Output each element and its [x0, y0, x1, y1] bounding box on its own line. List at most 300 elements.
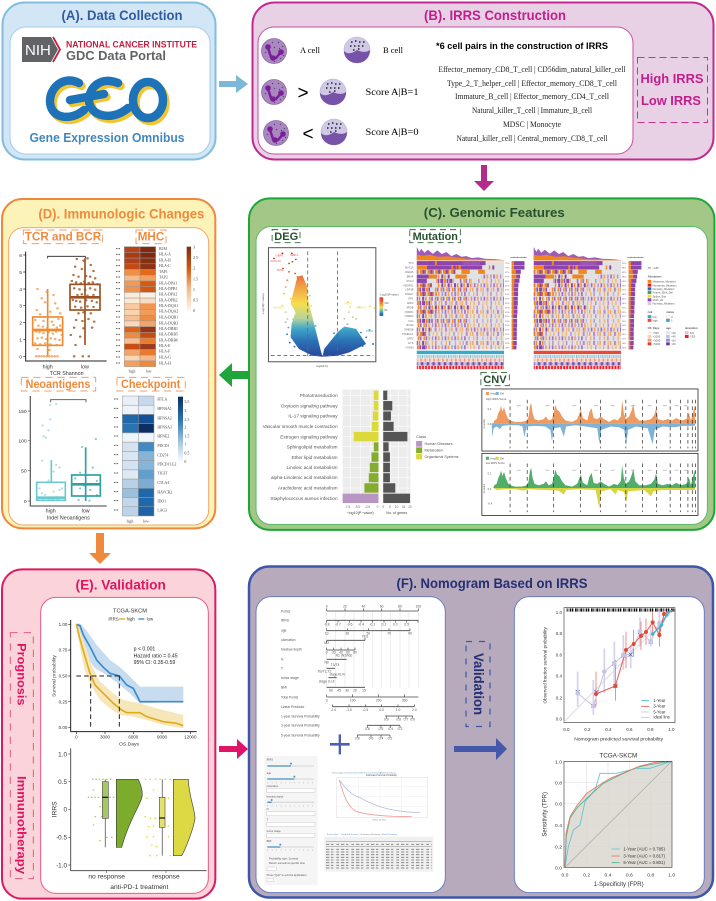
heatmap: Checkpoint: HAVCR2: [157, 490, 172, 494]
heatmap: MHC: HLA-DQA1: [159, 304, 178, 308]
shiny sidebar: ulceration: [267, 784, 279, 788]
chart: oncoprint high: 48%: [622, 277, 626, 279]
data table: Model Summary: [382, 833, 398, 836]
nomogram: [281, 605, 421, 741]
text: cell pairs: Natural_killer_cell | Central_memory_CD8_T_cell: [456, 134, 608, 143]
chart: oncoprint high: 31%: [622, 316, 626, 318]
survival plot: Predicted Survival: [344, 771, 362, 774]
legend: mutation: Alterations: [648, 275, 662, 279]
nomogram: 2.0: [412, 708, 417, 712]
legend: mutation: Nonsense_Mutation: [653, 283, 677, 287]
shiny sidebar: T: [267, 818, 269, 822]
shiny sidebar: Return survival at specific time: [269, 861, 306, 865]
chart: oncoprint low: BRAF: [407, 276, 414, 279]
chart: ROC: 0.8: [647, 872, 654, 878]
chart: volcano plot: log2(FC): [316, 364, 328, 368]
chart: Indel Neoantigens boxplot: low: [82, 509, 90, 515]
chart: ROC: 0.2: [555, 844, 562, 850]
nomogram: 0.8: [365, 727, 370, 731]
chart: volcano plot: IDO1: [277, 268, 284, 272]
heatmap: MHC: high: [129, 369, 135, 373]
legend: mutation: low: [653, 315, 657, 319]
chart: Kaplan-Meier: OS.Days: [119, 741, 139, 747]
chart: oncoprint high: 36%: [622, 294, 626, 296]
chart: CNV high IRRS: G score: [482, 419, 486, 429]
legend: Checkpoint colorbar: 3.5: [184, 399, 189, 404]
chart: oncoprint high: [534, 247, 644, 369]
chart: oncoprint high: 33%: [622, 307, 626, 309]
heatmap: Checkpoint: PDCD1LG2: [157, 462, 177, 466]
legend: mutation: risk: [648, 310, 653, 314]
heatmap: MHC: HLA-C: [159, 264, 171, 268]
heatmap: MHC: B2M: [159, 247, 167, 251]
nomogram: 3-year Survival Probability: [281, 724, 320, 728]
chart: TCR Shannon boxplot: TCR Shannon: [50, 371, 84, 377]
chart: oncoprint high: 28%: [622, 334, 626, 336]
heading F: (F). Nomogram Based on IRRS: [396, 575, 588, 591]
chart: KEGG enrichment bars: Linoleic acid metabolism: [287, 465, 338, 470]
nomogram: 45: [337, 688, 341, 692]
legend: mutation: 1: [671, 319, 673, 323]
survival plot: Model Summary: [380, 771, 397, 774]
chart: volcano plot: CXCL10: [270, 259, 281, 263]
chart: oncoprint low: HYDIN: [406, 346, 414, 349]
nomogram: 0: [326, 651, 328, 655]
chart: oncoprint low: [402, 247, 527, 369]
chart: Indel Neoantigens boxplot: [18, 396, 107, 521]
heatmap: MHC: HLA-A: [159, 253, 171, 257]
chart: oncoprint low: 75%: [505, 263, 509, 265]
chart: KEGG enrichment bars: -7.5: [345, 505, 350, 509]
chart: CNV low IRRS: 0.0: [488, 487, 492, 491]
legend: Checkpoint colorbar: 0.5: [184, 450, 189, 455]
legend: Class: Human Diseases: [424, 442, 453, 446]
chart: ROC: 0.6: [626, 872, 633, 878]
nomogram: -0.8: [324, 623, 330, 627]
chart: oncoprint low: CSMD3: [405, 315, 414, 318]
chart: oncoprint low: 29%: [505, 338, 509, 340]
tag: Checkpoint: Checkpoint: [121, 378, 180, 391]
chart: KEGG enrichment bars: Estrogen signaling pathway: [280, 434, 338, 439]
chart: oncoprint low: 44%: [505, 290, 509, 292]
chart: oncoprint high: 35%: [622, 299, 626, 301]
legend: Checkpoint colorbar: 2: [184, 425, 186, 430]
heatmap: Checkpoint: high: [127, 520, 133, 524]
label A cell: A cell: [300, 45, 321, 55]
legend: mutation: age: [666, 327, 671, 330]
chart: KEGG enrichment bars: 20: [408, 505, 412, 509]
chart: Indel Neoantigens boxplot: high: [46, 509, 56, 515]
legend: mutation: ulceration: [685, 326, 698, 330]
chart: oncoprint low: CSMD1: [405, 311, 414, 314]
chart: volcano plot: GBP4: [290, 253, 298, 257]
chart: calibration: Nomogram predicted survival probability: [574, 736, 664, 742]
chart: calibration: 0.6: [626, 727, 633, 732]
heading A: (A). Data Collection: [62, 7, 182, 23]
chart: volcano plot: PAEP: [366, 329, 373, 333]
chart: CNV high IRRS: 0.2: [488, 407, 492, 411]
legend: MHC colorbar: 2: [193, 266, 195, 271]
nomogram: T: [281, 667, 283, 671]
nomogram: 100: [350, 698, 356, 702]
callout: High / Low IRRS: High IRRS: [640, 71, 704, 86]
legend: MHC colorbar: 3: [193, 245, 195, 250]
nomogram: 70: [387, 632, 391, 636]
icon: B cell: [344, 37, 370, 63]
chart: CNV low IRRS: G score: [482, 483, 486, 493]
legend: mutation: NO: [690, 331, 694, 335]
heatmap: MHC: TAP2: [159, 276, 168, 280]
logo: NIH GDC: NIH: [25, 42, 51, 59]
chart: Kaplan-Meier: 9000: [157, 735, 167, 740]
legend: mutation: <30: [671, 331, 676, 335]
heatmap: Checkpoint: BTLA: [157, 398, 168, 402]
chart: KEGG enrichment bars: 5: [389, 505, 391, 509]
chart: raincloud IRRS: 0.5: [58, 779, 67, 786]
chart: oncoprint low: LRP1B: [406, 289, 414, 292]
chart: oncoprint low: BCAR: [406, 324, 414, 327]
legend: MHC colorbar: 1.5: [193, 276, 198, 281]
nomogram: 40: [339, 651, 343, 655]
chart: raincloud IRRS: 0: [63, 807, 67, 814]
legend: mutation: Frame_Shift_Del: [653, 291, 673, 295]
tag: MHC: MHC: [138, 231, 165, 244]
chart: oncoprint low: 40%: [505, 294, 509, 296]
legend: mutation: Nonstop_Mutation: [653, 302, 675, 306]
legend: mutation: >5000: [653, 342, 661, 346]
chart: oncoprint low: DNAH5: [405, 271, 414, 274]
legend: mutation: Splice_Site: [653, 294, 667, 298]
row: score less: <: [302, 124, 314, 145]
chart: KEGG enrichment bars: alpha-Linolenic acid metabolism: [271, 475, 338, 480]
chart: oncoprint low: EYS: [408, 342, 414, 345]
legend: calibration: 1-Year: [653, 698, 666, 703]
legend: Class: Organismal Systems: [424, 455, 459, 459]
chart: ROC: TCGA-SKCM: [599, 753, 637, 760]
chart: ROC: 0.0: [555, 865, 562, 871]
chart: raincloud IRRS: response: [152, 874, 180, 881]
chart: oncoprint low: 45%: [505, 285, 509, 287]
chart: KEGG enrichment bars: [263, 390, 459, 515]
chart: oncoprint high: 25%: [622, 347, 626, 349]
heatmap: Checkpoint: TIGIT: [157, 472, 168, 476]
heatmap: Checkpoint: PDCD1: [157, 444, 170, 448]
legend: Class: [416, 434, 459, 459]
chart: oncoprint high: 30%: [622, 325, 626, 327]
arrow: E to F: [219, 739, 248, 759]
nomogram: 90: [408, 632, 412, 636]
chart: CNV low IRRS: low IRRS Score: [486, 461, 505, 465]
chart: oncoprint high: 68%: [622, 267, 626, 269]
shiny sidebar: Probability type: Survival: [269, 856, 298, 860]
heatmap: Checkpoint: IDO1: [157, 499, 166, 503]
chart: oncoprint low: 34%: [505, 316, 509, 318]
chart: oncoprint high: 40%: [622, 281, 626, 283]
chart: TCR Shannon boxplot: 5: [19, 270, 22, 276]
chart: ROC: 1-Specificity (FPR): [594, 882, 644, 888]
panel C: Genomic Features: [249, 198, 714, 530]
chart: oncoprint low: 28%: [505, 343, 509, 345]
row: score greater: Score A|B=1: [366, 88, 419, 98]
nomogram: 0.3: [393, 623, 398, 627]
heatmap: Checkpoint: CTLA4: [157, 481, 169, 485]
shiny sidebar: tumor stage: [267, 829, 281, 833]
heatmap: MHC: HLA-B: [159, 258, 171, 262]
nomogram: BMI: [281, 686, 287, 690]
tag: Prognosis / Immunotherapy: Prognosis: [14, 643, 28, 706]
heatmap: MHC: HLA-DPA1: [159, 281, 177, 285]
legend: mutation: <45: [671, 335, 676, 339]
chart: oncoprint low: 28%: [505, 347, 509, 349]
chart: oncoprint high: 37%: [622, 290, 626, 292]
chart: oncoprint low: 33%: [505, 321, 509, 323]
nomogram: 30: [345, 688, 349, 692]
nomogram: 1.0: [396, 708, 400, 712]
legend: calibration: 5-Year: [653, 709, 666, 714]
chart: Kaplan-Meier: [52, 609, 197, 747]
tag: Prognosis / Immunotherapy: Immunotherapy: [14, 776, 28, 874]
survival plot: [332, 771, 428, 821]
chart: oncoprint high: 29%: [622, 330, 626, 332]
survival plot: Numerical Summary: [362, 771, 382, 774]
arrow: A to B: [219, 75, 248, 93]
chart: CNV high IRRS: High IRRS Score: [486, 397, 507, 401]
legend: ROC: [612, 846, 665, 865]
nomogram: age: [281, 628, 287, 632]
nomogram: 0.6: [369, 737, 373, 741]
heatmap: MHC: [116, 245, 198, 373]
nomogram: 80: [353, 651, 357, 655]
nomogram: 0.5: [404, 623, 409, 627]
chart: KEGG enrichment bars: Phototransduction: [300, 393, 338, 398]
chart: calibration: 0.2: [584, 727, 591, 732]
survival plot: Survival plot: [332, 771, 344, 774]
chart: TCR Shannon boxplot: high: [43, 364, 53, 370]
chart: Kaplan-Meier: Survival probability: [52, 655, 58, 697]
chart: KEGG enrichment bars: Sphingolipid metabolism: [287, 444, 338, 449]
legend: mutation: <5000: [653, 338, 661, 342]
nomogram: 0.8: [355, 737, 360, 741]
chart: ROC: 0.8: [555, 780, 562, 786]
chart: calibration: [542, 608, 675, 742]
chart: raincloud IRRS: -1.0: [56, 862, 67, 869]
nomogram: Total Points: [281, 695, 299, 699]
nomogram: 0.4: [388, 727, 393, 731]
nomogram: 0.3: [398, 727, 402, 731]
nomogram: 30: [345, 632, 349, 636]
chart: calibration: 0.6: [556, 652, 563, 657]
chart: Indel Neoantigens boxplot: 50: [21, 469, 27, 475]
nomogram: ulceration: [281, 638, 296, 642]
chart: Indel Neoantigens boxplot: 0: [24, 499, 27, 505]
survival plot: Estimated Survival Probability: [366, 774, 398, 777]
chart: raincloud IRRS: -0.5: [56, 835, 67, 842]
chart: oncoprint high: 32%: [622, 312, 626, 314]
arrow: C to D: [219, 363, 248, 387]
shiny sidebar: age: [267, 772, 272, 775]
nomogram: 60: [329, 688, 333, 692]
legend: MHC colorbar: 0.5: [193, 297, 198, 302]
nomogram: tumor stage: [281, 676, 299, 680]
legend: ROC: 5-Year (AUC = 0.801): [623, 860, 665, 865]
tag: Validation: Validation: [471, 653, 487, 715]
chart: volcano plot: GBP5: [276, 254, 284, 258]
heatmap: MHC: TAP1: [159, 270, 168, 274]
heading C: (C). Genomic Features: [424, 205, 565, 220]
chart: Kaplan-Meier: 3000: [100, 735, 110, 740]
nomogram: 0.6: [410, 718, 415, 722]
chart: Kaplan-Meier: low: [147, 617, 154, 622]
card: validation plots: [514, 597, 704, 893]
chart: calibration: 1.0: [556, 610, 563, 615]
nomogram: 0.4: [379, 737, 383, 741]
nomogram: IRRS: [281, 619, 290, 623]
chart: KEGG enrichment bars: 10: [395, 505, 399, 509]
nomogram: YES: [362, 634, 369, 638]
heatmap: MHC: HLA-G: [159, 356, 171, 360]
chart: TCR Shannon boxplot: 1: [19, 337, 22, 343]
chart: calibration: 1.0: [668, 727, 675, 732]
nomogram: 0.9: [384, 718, 389, 722]
chart: Kaplan-Meier: 0: [75, 735, 78, 740]
chart: oncoprint low: 39%: [505, 299, 509, 301]
callout: High / Low IRRS: Low IRRS: [641, 93, 701, 108]
chart: oncoprint low: 38%: [505, 303, 509, 305]
legend: mutation: OS_Days: [648, 326, 660, 330]
text: cell pairs: *6 cell pairs in the construction of IRRS: [436, 41, 608, 52]
nomogram: 0.1: [382, 623, 386, 627]
icon: plus: [330, 734, 350, 754]
heatmap: MHC: HLA-DPA2: [159, 293, 177, 297]
nomogram: 40: [361, 605, 365, 609]
legend: mutation: <60: [671, 338, 676, 342]
panel F: Nomogram Based on IRRS: [249, 566, 713, 898]
shiny sidebar: [264, 756, 318, 885]
heatmap: MHC: HLA-DRB5: [159, 333, 178, 337]
legend: mutation: 0: [671, 315, 673, 319]
chart: TCR Shannon boxplot: 3: [19, 304, 22, 310]
chart: oncoprint low: APOB: [406, 306, 414, 309]
chart: Kaplan-Meier: 95% CI: 0.35-0.59: [134, 660, 175, 666]
chart: oncoprint low: 46%: [505, 281, 509, 283]
chart: KEGG enrichment bars: 15: [402, 505, 405, 509]
legend: mutation: <500: [653, 331, 659, 335]
chart: ROC: 0.4: [555, 823, 562, 829]
chart: Kaplan-Meier: p < 0.001: [134, 646, 155, 652]
logo: NIH GDC: GDC Data Portal: [66, 49, 166, 63]
chart: oncoprint low: ANK3: [407, 302, 414, 305]
nomogram: T3/T4: [331, 663, 339, 667]
chart: CNV high IRRS: Amp: [490, 392, 496, 396]
heatmap: Checkpoint: CD274: [157, 453, 168, 457]
text: cell pairs: Effector_memory_CD8_T_cell | CD56dim_natural_killer_cell: [438, 65, 626, 74]
chart: Kaplan-Meier: TCGA-SKCM: [113, 609, 147, 615]
text: cell pairs: [436, 41, 626, 143]
chart: calibration: Observed fraction survival probability: [542, 626, 547, 704]
tag: DEG: DEG: [274, 231, 298, 243]
chart: KEGG enrichment bars: -5.0: [355, 505, 360, 509]
shiny sidebar: IRRS: [267, 758, 273, 762]
chart: Indel Neoantigens boxplot: 100: [18, 439, 27, 445]
chart: volcano plot: MAGEA: [356, 305, 366, 309]
survival plot: Follow Up Time: [372, 819, 387, 821]
legend: mutation: TP - 4.86: [648, 266, 659, 270]
chart: oncoprint high: 26%: [622, 343, 626, 345]
nomogram: 0: [326, 605, 328, 609]
chart: Kaplan-Meier: 1.00: [59, 622, 68, 627]
chart: ROC: Sensitivity (TPR): [542, 792, 548, 837]
nomogram: 20: [353, 688, 357, 692]
arrow: to validation plots: [454, 738, 507, 760]
chart: oncoprint high: 38%: [622, 285, 626, 287]
data table: Survival plot: [327, 833, 339, 836]
chart: CNV low IRRS: Amp: [490, 456, 496, 460]
chart: oncoprint low: GRIN2B: [404, 329, 414, 332]
arrow: D to E: [89, 533, 111, 564]
chart: Kaplan-Meier: Hazard ratio = 0.45: [134, 653, 178, 659]
legend: mutation: Multi_Hit: [653, 298, 663, 302]
legend: volcano colorbar: 100: [384, 301, 389, 305]
chart: Kaplan-Meier: 0.25: [59, 699, 68, 704]
heatmap: Checkpoint: HFNSA3: [157, 426, 172, 430]
heatmap: Checkpoint: [114, 396, 189, 524]
tag: Validation: [466, 642, 490, 726]
legend: MHC colorbar: [187, 245, 198, 313]
chart: TCR Shannon boxplot: low: [81, 364, 89, 370]
heatmap: MHC: HLA-F: [159, 350, 170, 354]
chart: raincloud IRRS: anti-PD-1 treatment: [110, 884, 169, 891]
heatmap: Checkpoint: low: [143, 520, 149, 524]
nomogram: N0: [325, 660, 329, 664]
heatmap: Checkpoint: HFNE2: [157, 435, 169, 439]
chart: oncoprint low: 38%: [505, 307, 509, 309]
chart: Indel Neoantigens boxplot: Indel Neoantigens: [47, 515, 90, 521]
legend: MHC colorbar: 1: [193, 287, 195, 292]
nomogram: Points: [281, 609, 291, 613]
nomogram: -1.0: [346, 708, 352, 712]
chart: KEGG enrichment bars: IL-17 signaling pathway: [288, 413, 338, 418]
legend: calibration: 3-Year: [653, 704, 666, 709]
legend: ROC: 3-Year (AUC = 0.817): [623, 853, 665, 858]
chart: CNV low IRRS: 0.2: [488, 472, 492, 476]
chart: Kaplan-Meier: high: [127, 617, 135, 622]
heading D: (D). Immunologic Changes: [38, 207, 205, 222]
chart: volcano plot: KRT5: [345, 301, 352, 305]
tag: TCR and BCR: TCR and BCR: [25, 231, 102, 244]
chart: raincloud IRRS: no response: [88, 874, 125, 881]
nomogram: -0.4: [358, 623, 364, 627]
nomogram: -2.0: [330, 708, 336, 712]
nomogram: 300: [402, 698, 408, 702]
heatmap: MHC: HLA-DPB2: [159, 298, 178, 302]
shiny sidebar: breslow depth: [267, 794, 284, 798]
nomogram: stage III,IV: [329, 672, 346, 676]
chart: KEGG enrichment bars: -2.5: [365, 505, 370, 509]
tag: Neoantigens: Neoantigens: [26, 378, 90, 391]
chart: oncoprint low: 29%: [505, 334, 509, 336]
chart: oncoprint high: 49%: [622, 272, 626, 274]
icon: A cell: [262, 38, 286, 64]
chart: oncoprint low: MUC16: [405, 266, 414, 269]
chart: ROC: 1.0: [668, 872, 675, 878]
text: cell pairs: MDSC | Monocyte: [503, 120, 561, 129]
legend: Checkpoint colorbar: [178, 397, 189, 464]
chart: oncoprint low: 53%: [505, 277, 509, 279]
chart: TCR Shannon boxplot: [19, 252, 107, 377]
chart: oncoprint high: 30%: [622, 321, 626, 323]
nomogram: 1-year Survival Probability: [281, 714, 320, 718]
heatmap: MHC: HLA-DPB1: [159, 287, 178, 291]
